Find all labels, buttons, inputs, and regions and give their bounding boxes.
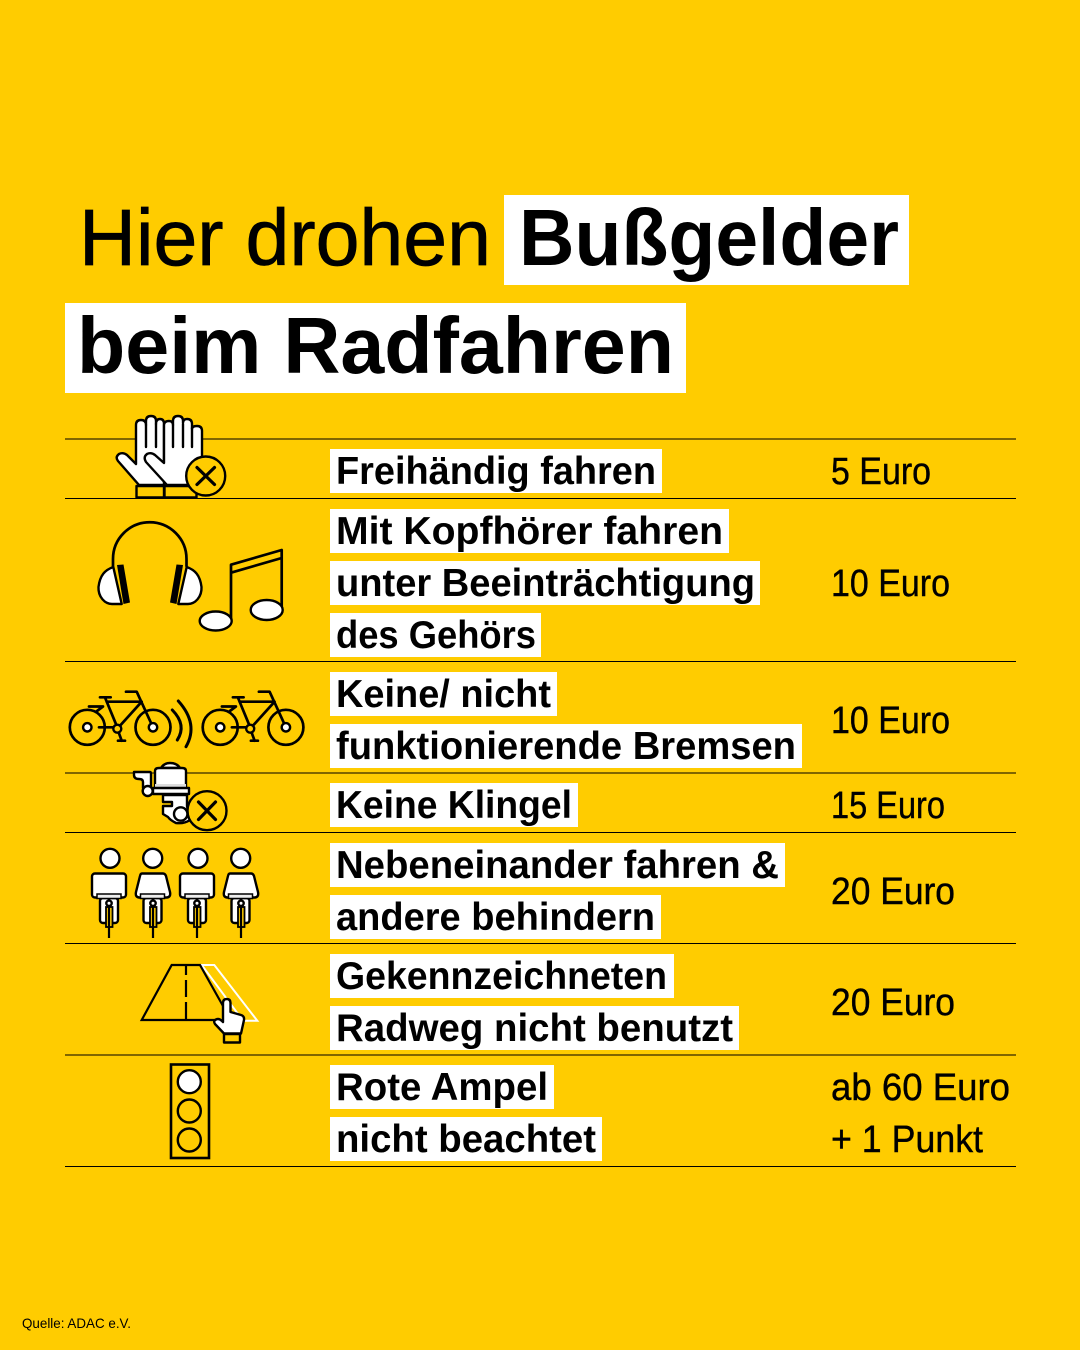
title: beim Radfahren <box>77 301 674 390</box>
price: 20 Euro side by side: 20 Euro <box>831 871 955 913</box>
price: 5 Euro: 5 Euro <box>831 451 931 493</box>
text: Keine / nicht funktionierende Bremsen: funktionierende Bremsen <box>336 725 796 768</box>
text: Mit Kopfhörer fahren: des Gehörs <box>336 614 536 657</box>
text: Mit Kopfhörer fahren <box>330 509 760 657</box>
price: ab 60 Euro + 1 Punkt <box>831 1067 1010 1161</box>
icon: road with cycle lane and pointing hand <box>142 964 257 1042</box>
price: 20 Euro cycle lane: 20 Euro <box>831 982 955 1024</box>
price: ab 60 Euro + 1 Punkt: ab 60 Euro <box>831 1067 1010 1109</box>
text: Nebeneinander fahren: Nebeneinander fahren & <box>336 844 779 887</box>
text: Freihändig fahren: Freihändig fahren <box>336 450 656 493</box>
title <box>65 193 909 393</box>
text: Rote Ampel nicht beachtet: Rote Ampel <box>336 1066 548 1109</box>
title: Hier drohen <box>79 193 491 282</box>
icon: two bicycles with sound waves <box>70 692 303 747</box>
price: ab 60 Euro + 1 Punkt: + 1 Punkt <box>831 1119 983 1161</box>
price: 15 Euro: 15 Euro <box>831 785 945 827</box>
text: Rote Ampel nicht beachtet: nicht beachtet <box>336 1118 596 1161</box>
text: Gekennzeichneten Radweg: Radweg nicht benutzt <box>336 1007 733 1050</box>
price: 10 Euro headphones: 10 Euro <box>831 563 950 605</box>
text: Rote Ampel nicht beachtet <box>330 1065 602 1161</box>
price: 10 Euro brakes: 10 Euro <box>831 700 950 742</box>
title: Bußgelder <box>519 193 899 282</box>
text: Keine Klingel: Keine Klingel <box>336 784 572 827</box>
text: Mit Kopfhörer fahren: unter Beeinträchtigung <box>336 562 755 605</box>
text: Mit Kopfhörer fahren: Mit Kopfhörer fahren <box>336 510 723 553</box>
icon: hands with cross <box>117 416 225 498</box>
text: Keine / nicht funktionierende Bremsen: Keine/ nicht <box>336 673 551 716</box>
icon: bell with cross <box>134 763 226 830</box>
text: Nebeneinander fahren <box>330 843 785 939</box>
source note: Quelle: ADAC e.V. <box>22 1315 131 1331</box>
text: Nebeneinander fahren: andere behindern <box>336 896 655 939</box>
text: Keine / nicht funktionierende Bremsen <box>330 672 802 768</box>
text: Gekennzeichneten Radweg: Gekennzeichneten <box>336 955 667 998</box>
icon: headphones and music notes <box>98 522 283 630</box>
icon: traffic light <box>171 1064 209 1158</box>
icon: four cyclists side by side <box>92 849 258 938</box>
text: Gekennzeichneten Radweg <box>330 954 739 1050</box>
